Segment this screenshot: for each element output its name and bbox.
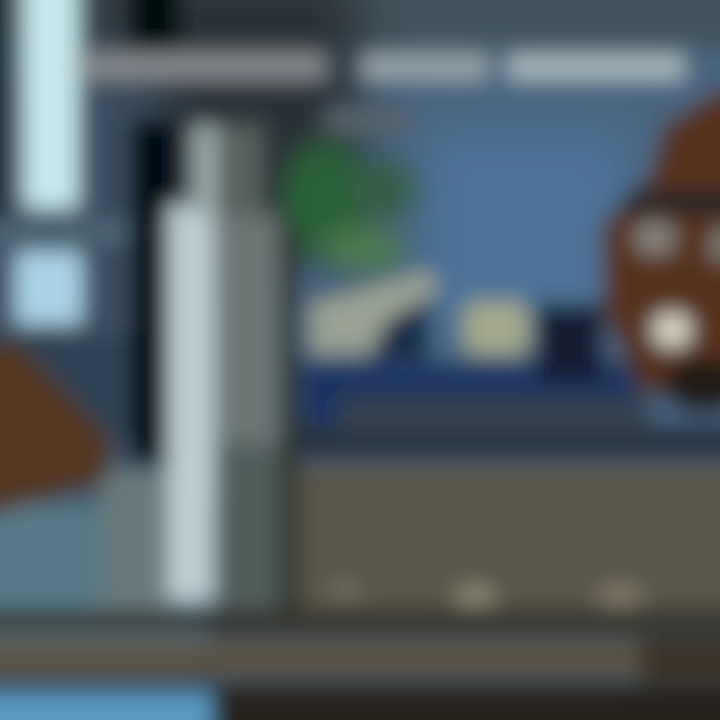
sofa: [300, 304, 650, 432]
bottle: [168, 125, 298, 613]
title band: [76, 52, 684, 132]
cushions: [310, 270, 528, 354]
brown object left: [0, 342, 112, 520]
window on the left: [0, 0, 150, 435]
bright spots on table: [327, 581, 644, 606]
background wall: [0, 0, 720, 500]
dark band above the table: [290, 425, 720, 459]
plant: [281, 140, 417, 272]
bottom strip: [0, 686, 720, 720]
table edge band: [0, 610, 720, 682]
floor and table surface: [0, 465, 720, 640]
brown object right: [602, 90, 720, 413]
dark column behind bottle: [130, 0, 180, 463]
